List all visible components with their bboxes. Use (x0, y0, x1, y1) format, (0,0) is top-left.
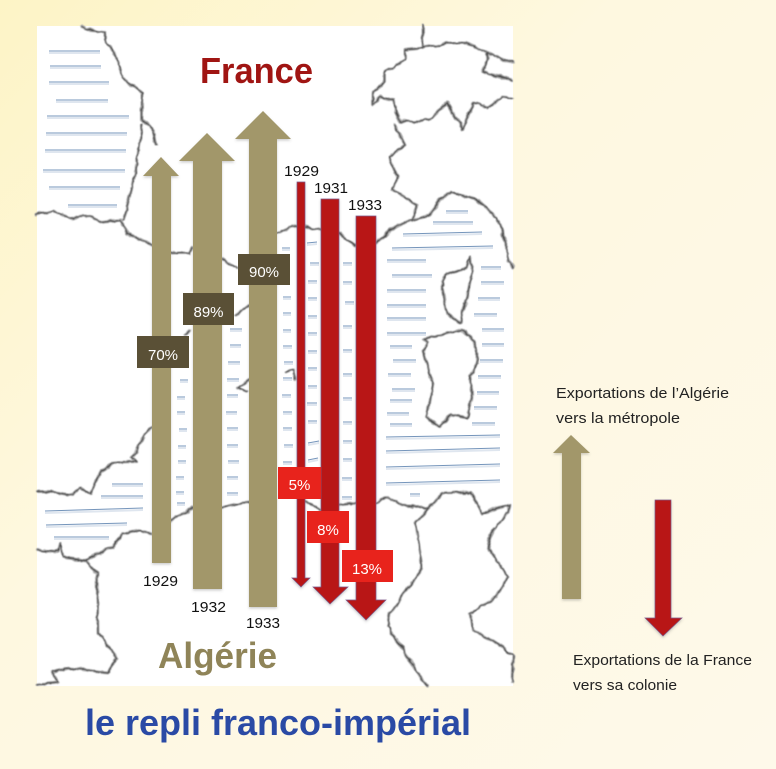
legend arrow: red down (645, 500, 682, 636)
arrow: 1931 France exports (313, 199, 348, 604)
panel: map background (37, 26, 513, 686)
label: 5%: 5% (289, 477, 310, 494)
legend text: Algeria exports: vers la métropole (556, 410, 680, 427)
label: 13% (342, 550, 393, 582)
label: 13%: 13% (352, 561, 382, 578)
arrow: 1929 France exports (292, 182, 310, 587)
label: 5% (278, 467, 321, 499)
label: 90%: 90% (249, 264, 279, 281)
year: 1932: 1932 (191, 599, 226, 616)
chart: exports from France to Algeria (278, 163, 393, 620)
label: 8%: 8% (317, 522, 339, 539)
label: 90% (238, 254, 290, 285)
legend text: France exports: vers sa colonie (573, 677, 677, 694)
label: 89% (183, 293, 234, 325)
label: 70%: 70% (148, 347, 178, 364)
arrow: 1933 Algeria exports (235, 111, 291, 607)
label: 89%: 89% (193, 304, 224, 321)
title: le repli franco-impérial (85, 702, 471, 743)
legend: Algeria exports (553, 385, 729, 599)
year: 1929: 1929 (284, 163, 319, 180)
arrow: 1932 Algeria exports (179, 133, 235, 589)
legend: France exports (573, 500, 752, 694)
year: 1931: 1931 (314, 180, 348, 197)
chart: exports from Algeria to France (137, 111, 291, 632)
legend text: Algeria exports: Exportations de l’Algérie (556, 385, 729, 402)
map borders (37, 26, 513, 685)
arrow: 1933 France exports (346, 216, 386, 620)
year: 1933: 1933 (246, 615, 280, 632)
label: 8% (307, 511, 349, 543)
sea hatching (43, 51, 504, 539)
arrow: 1929 Algeria exports (143, 157, 179, 563)
label: 70% (137, 336, 189, 368)
heading: France: France (200, 50, 313, 91)
legend arrow: tan up (553, 435, 590, 599)
legend text: France exports: Exportations de la France (573, 652, 752, 669)
year: 1933: 1933 (348, 197, 382, 214)
year: 1929: 1929 (143, 573, 178, 590)
heading: Algérie: Algérie (158, 635, 277, 676)
